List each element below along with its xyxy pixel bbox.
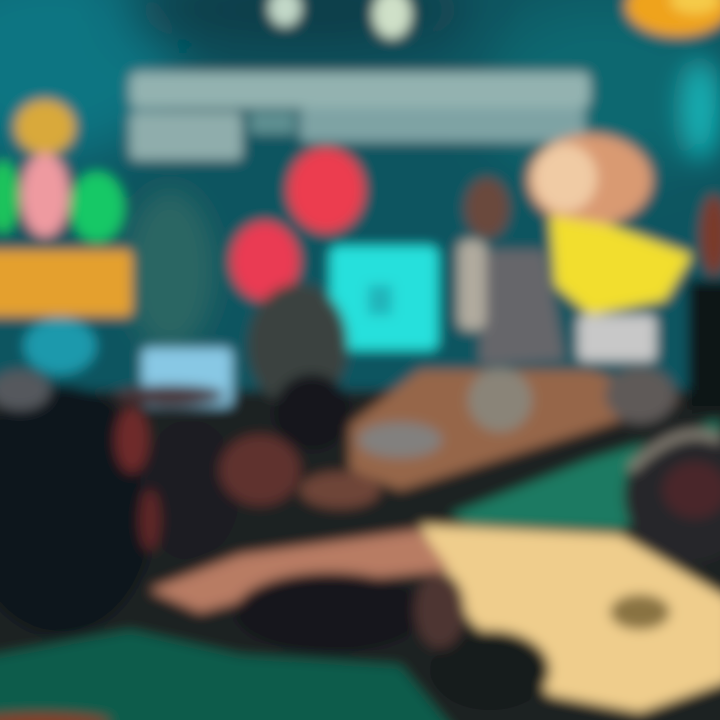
top right yellow shape <box>626 0 720 36</box>
cream table <box>420 525 720 712</box>
peach band <box>150 530 450 612</box>
yellow star character <box>528 134 692 361</box>
black foreground objects <box>235 572 550 710</box>
left game icons <box>0 100 132 374</box>
wooden desk <box>350 367 680 490</box>
cyan screen <box>330 246 438 350</box>
icon: pink figure <box>21 153 69 237</box>
red balloons <box>231 148 364 300</box>
green floor bottom <box>0 630 470 720</box>
dark crowd pile left <box>0 370 380 635</box>
person in dark clothes <box>248 283 350 450</box>
round dark object <box>624 427 720 563</box>
person in grey clothes <box>458 178 565 365</box>
blurred title <box>130 72 590 160</box>
table marking <box>610 594 670 630</box>
ceiling lights <box>269 0 411 38</box>
icon: left green circle <box>0 161 19 233</box>
orange banner <box>0 250 132 316</box>
icon: right green circle <box>70 172 124 242</box>
green floor <box>450 420 720 530</box>
icon: yellow circle <box>15 100 75 154</box>
light blue laptop <box>142 348 232 406</box>
dark figure right edge <box>688 195 720 410</box>
teal badge <box>24 318 96 374</box>
